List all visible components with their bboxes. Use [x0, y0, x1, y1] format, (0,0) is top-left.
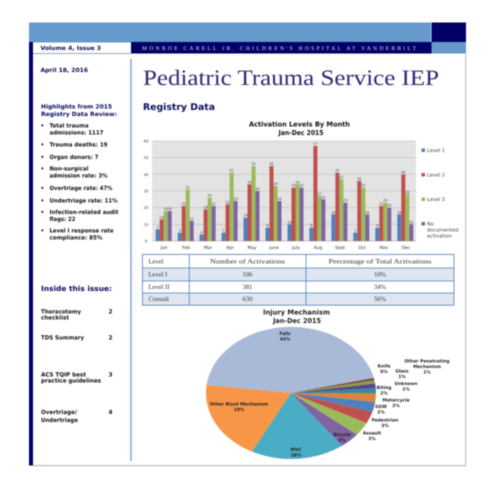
chart legend: documented — [427, 228, 458, 234]
pie label: Motorcycle: 2% — [392, 403, 400, 409]
contents entry: overtriage — [41, 409, 113, 424]
inside heading: Inside this issue: — [41, 284, 112, 293]
table row: Level II: 34% — [374, 284, 387, 291]
highlights bullet list: Organ donors: 7 — [50, 154, 98, 161]
pie label: Other Penetrating Mechanism: 1% — [423, 370, 431, 376]
month group: Dec: 10 — [409, 220, 413, 224]
pie label: Unknown — [395, 381, 417, 392]
month group: Aug: 25 — [321, 195, 326, 199]
x axis month labels: Jan — [160, 245, 168, 251]
panel: inside this issue — [41, 284, 113, 424]
y axis labels — [144, 138, 149, 244]
bar chart: activation levels by month — [144, 121, 458, 251]
table row: Level II: Level II — [148, 284, 170, 291]
pie label: Bicycle: Bicycle — [333, 432, 351, 438]
month group: Mar: 26 — [207, 194, 212, 198]
contents entry: ACS TQIP: 3 — [108, 372, 113, 379]
month group: July — [287, 180, 304, 241]
title: Pediatric Trauma Service IEP — [143, 65, 439, 90]
month group: Dec: 28 — [405, 190, 409, 194]
pie label: GSW: GSW — [375, 404, 387, 410]
contents entry: thoracotomy checklist — [41, 309, 113, 322]
pie label: Falls — [279, 331, 291, 342]
contents entry: overtriage: Overtriage/ — [41, 409, 78, 416]
highlights bullet list: Overtriage rate: 47% — [50, 185, 113, 192]
chart title: Activation Levels By Month — [249, 121, 350, 129]
y axis labels: 60 — [144, 138, 149, 144]
table row: Consult: 630 — [243, 296, 253, 303]
pie slices — [206, 327, 376, 459]
month group: July: 32 — [299, 184, 304, 188]
month group: Oct: 16 — [365, 210, 369, 214]
month group: Mar: 19 — [203, 205, 208, 209]
y axis labels: 10 — [144, 222, 149, 227]
chart legend: No — [427, 222, 434, 228]
table header row — [148, 258, 432, 266]
panel: registry highlights sidebar — [40, 104, 119, 242]
table header row: Level — [148, 258, 164, 266]
pie label: Unknown: Unknown — [395, 381, 417, 387]
month group: May: 30 — [255, 187, 260, 191]
pie label: Unknown: 1% — [402, 386, 410, 392]
month group: Feb: 5 — [179, 229, 181, 233]
month group: Nov — [375, 199, 391, 241]
month group: Nov: 20 — [387, 204, 391, 208]
pie label: Bicycle — [333, 432, 351, 444]
month group: Jan: 7 — [157, 226, 159, 230]
highlights bullet list: admissions: 1117 — [50, 130, 104, 136]
month group: Oct: 36 — [357, 177, 361, 181]
month group: Aug — [309, 142, 326, 241]
pie label: Knife — [378, 364, 390, 375]
issue label: Volume 4, Issue 3 — [40, 45, 101, 52]
x axis month labels: July — [291, 245, 300, 251]
month group: Aug: 57 — [313, 142, 318, 146]
month group: July: 10 — [287, 220, 292, 224]
x axis month labels: Apr — [226, 245, 234, 251]
month group: July: 32 — [291, 184, 296, 188]
month group: Aug: 27 — [317, 192, 322, 196]
contents entry: thoracotomy checklist: 2 — [108, 309, 113, 316]
pie label: Other Penetrating Mechanism: Other Penetrating — [404, 358, 450, 364]
month group: Apr: 24 — [233, 197, 238, 201]
pie label: Knife: Knife — [378, 364, 390, 370]
contents entry: ACS TQIP — [41, 372, 113, 385]
highlights bullet list — [40, 122, 119, 242]
month group: June: 33 — [273, 182, 278, 186]
pie label: MVC — [290, 447, 302, 458]
month group: Aug: 8 — [310, 224, 312, 228]
contents entry: TDS summary — [41, 335, 113, 342]
pie label: Assault: 3% — [368, 436, 376, 442]
pie label: Biting: Biting — [377, 385, 391, 391]
highlights bullet list: • — [40, 167, 44, 173]
month group: Jan: 18 — [168, 207, 172, 211]
chart title — [249, 121, 350, 137]
table row: Level II — [148, 284, 387, 291]
pie label: Other Blunt Mechanism: 19% — [234, 407, 245, 413]
highlights bullet list: Non-surgical — [50, 166, 89, 173]
pie label: Glass — [395, 368, 409, 380]
pie label: Motorcycle: Motorcycle — [382, 398, 410, 404]
chart legend — [422, 148, 458, 240]
y axis labels: 0 — [145, 238, 148, 244]
chart legend: Level 1 — [427, 148, 445, 154]
month group: Mar — [200, 194, 216, 241]
highlights bullet list: Infection-related audit — [50, 209, 119, 216]
contents entry: overtriage: 4 — [108, 409, 113, 416]
month group: June: 8 — [266, 224, 269, 228]
pie label: Glass: 1% — [398, 374, 406, 380]
table row: Consult: 56% — [374, 296, 387, 303]
month group: Feb: 31 — [186, 185, 190, 189]
x axis month labels — [160, 245, 411, 251]
table row: Level II: 381 — [243, 284, 252, 291]
pie label: MVC: 18% — [291, 452, 302, 458]
heading: Registry Data: Registry Data — [143, 102, 215, 113]
table row: Level I: 106 — [243, 272, 253, 278]
month group: June: 24 — [277, 197, 282, 201]
month group: May: 34 — [247, 180, 252, 184]
month group: Dec: 16 — [397, 210, 401, 214]
month group: Nov: 8 — [376, 224, 378, 228]
month group: Oct — [353, 177, 369, 241]
month group: Feb: 21 — [182, 202, 186, 206]
month group: Apr — [222, 169, 238, 241]
x axis month labels: Feb — [182, 245, 190, 251]
y axis labels: 20 — [144, 205, 149, 210]
highlights bullet list: • — [40, 186, 44, 192]
month group: Jan: 18 — [164, 207, 168, 211]
hospital name banner text: MONROE CARELL JR. CHILDREN'S HOSPITAL AT VANDERBILT — [142, 46, 417, 52]
pie label: Biting: 2% — [380, 390, 388, 396]
month group: Dec: 40 — [401, 170, 405, 174]
x axis month labels: May — [247, 245, 257, 251]
pie label: MVC: MVC — [290, 447, 302, 453]
table header row: Percentage of Total Activations — [328, 258, 432, 266]
month group: Oct: 32 — [361, 184, 365, 188]
month group: Apr: 22 — [225, 200, 230, 204]
chart legend: activation — [427, 234, 452, 240]
table row: Level I — [148, 272, 387, 278]
month group: Jan: 13 — [160, 216, 164, 220]
pie label: Assault: Assault — [363, 430, 381, 436]
highlights bullet list: Total trauma — [50, 122, 89, 130]
x axis month labels: Oct — [358, 245, 366, 251]
highlights bullet list: • — [40, 210, 44, 216]
month group: June — [266, 162, 282, 241]
highlights bullet list: • — [40, 124, 44, 130]
y axis labels: 50 — [144, 155, 149, 160]
month group: Sept: 23 — [343, 199, 348, 203]
pie label: Other Blunt Mechanism — [210, 402, 269, 413]
month group: Sept: 16 — [331, 210, 336, 214]
highlights bullet list: • — [40, 198, 44, 204]
pie label: Other Blunt Mechanism: Other Blunt Mechanism — [210, 402, 269, 408]
month group: Jan — [156, 207, 172, 241]
pie label: Falls: 44% — [280, 336, 291, 342]
month group: Sept: 41 — [335, 169, 340, 173]
month group: Dec — [397, 170, 413, 241]
pie label: Glass: Glass — [395, 368, 409, 374]
pie chart: injury mechanism — [206, 308, 450, 459]
y axis labels: 30 — [144, 188, 149, 194]
month group: Nov: 23 — [383, 199, 387, 203]
table: activations by level — [142, 254, 454, 305]
contents entry: TDS summary: TDS Summary — [41, 335, 84, 342]
pie label: GSW — [375, 404, 387, 416]
chart legend: Level 3 — [427, 197, 445, 203]
highlights bullet list: • — [40, 155, 44, 161]
pie label: Other Penetrating Mechanism: Mechanism — [413, 364, 441, 370]
month group: May: 14 — [243, 214, 248, 218]
month group: Mar: 21 — [211, 202, 216, 206]
pie label: Assault — [363, 430, 381, 442]
pie label: Knife: 0% — [380, 369, 388, 375]
highlights bullet list: admission rate: 3% — [50, 172, 108, 179]
month group: Sept — [331, 169, 348, 241]
table row: Consult — [148, 296, 387, 303]
highlights heading: Highlights from 2015 — [41, 104, 112, 111]
highlights heading: Registry Data Review: — [41, 111, 117, 118]
highlights bullet list: Undertriage rate: 11% — [50, 197, 118, 204]
x axis month labels: Sept — [335, 245, 345, 251]
chart legend: Level 2 — [427, 172, 445, 178]
highlights bullet list: • — [40, 229, 44, 235]
highlights heading — [41, 104, 117, 118]
month group: May: 45 — [251, 162, 256, 166]
pie title: Injury Mechanism — [263, 308, 330, 316]
table row: Level I: 10% — [374, 272, 387, 278]
contents entry: ACS TQIP: practice guidelines — [41, 378, 102, 385]
pie label: Biting — [377, 385, 391, 396]
table row: Consult: Consult — [148, 296, 169, 303]
month group: Sept: 37 — [339, 175, 344, 179]
highlights bullet list: Trauma deaths: 19 — [50, 142, 108, 149]
contents entry: TDS summary: 2 — [108, 335, 113, 342]
pie label: Pedestrian: 3% — [381, 423, 389, 429]
contents entry: overtriage: Undertriage — [41, 417, 78, 424]
pie label: Motorcycle — [382, 398, 410, 409]
x axis month labels: Dec — [402, 245, 411, 251]
highlights bullet list: Level I response rate — [50, 228, 114, 235]
pie label: GSW: 2% — [377, 410, 385, 416]
date: April 18, 2016 — [40, 67, 88, 74]
month group: June: 45 — [269, 162, 274, 166]
highlights bullet list: flags: 22 — [50, 216, 76, 223]
pie label: Bicycle: 4% — [338, 438, 346, 444]
x axis month labels: Nov — [380, 245, 389, 251]
pie title: Jan-Dec 2015 — [272, 317, 321, 325]
pie label: Pedestrian: Pedestrian — [372, 418, 398, 424]
pie label: Falls: Falls — [279, 331, 291, 337]
month group: Feb — [178, 185, 194, 241]
x axis month labels: Aug — [314, 245, 322, 251]
y axis labels: 40 — [144, 172, 149, 177]
month group: Apr: 41 — [229, 169, 234, 173]
pie label: Other Penetrating Mechanism — [404, 358, 450, 376]
highlights bullet list: compliance: 85% — [50, 235, 103, 242]
contents entry: thoracotomy checklist: Thoracotomy — [41, 309, 81, 316]
table header row: Number of Activations — [210, 258, 286, 266]
month group: Mar: 4 — [201, 230, 203, 234]
panel: page masthead and frame — [29, 22, 466, 466]
table row: Level I: Level I — [148, 272, 167, 278]
pie label: Pedestrian — [372, 418, 398, 429]
x axis month labels: June — [268, 245, 279, 251]
chart title: Jan-Dec 2015 — [278, 129, 324, 137]
month group: Feb: 12 — [190, 217, 194, 221]
contents entry: ACS TQIP: ACS TQIP best — [41, 372, 86, 379]
month group: Oct: 5 — [354, 229, 356, 233]
pie title — [263, 308, 330, 325]
x axis month labels: Mar — [204, 245, 212, 251]
month group: July: 34 — [295, 180, 300, 184]
month group: Nov: 21 — [379, 202, 383, 206]
month group: Apr: 5 — [223, 229, 225, 233]
highlights bullet list: • — [40, 143, 44, 149]
month group: May — [243, 162, 260, 241]
contents entry: thoracotomy checklist: checklist — [41, 315, 69, 322]
